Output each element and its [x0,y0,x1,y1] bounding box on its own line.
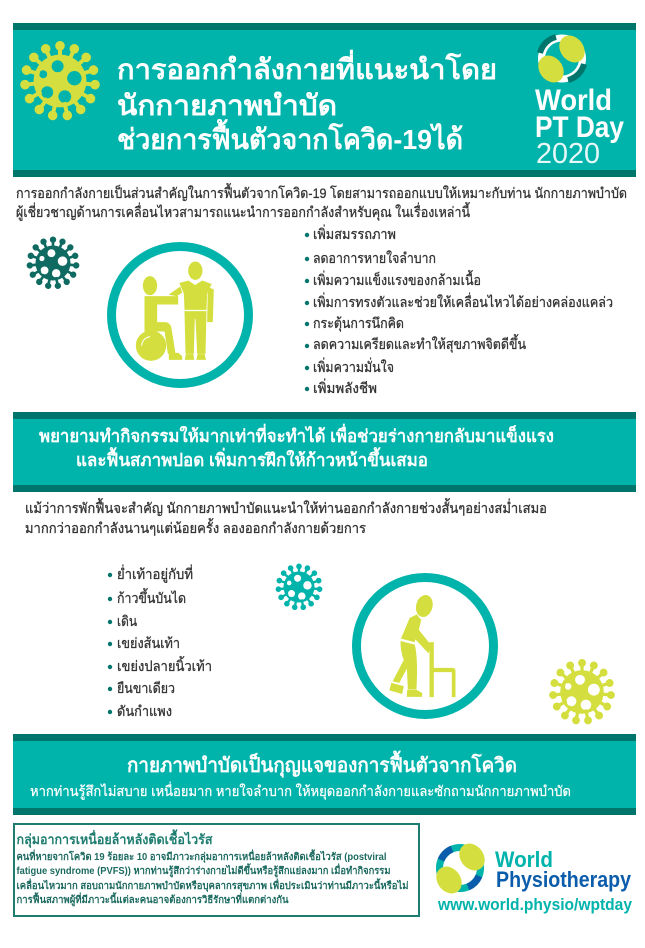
logo: World Physiotherapy: World [495,847,553,872]
icon: dark green virus [26,236,80,290]
icon: lime virus lower right [549,659,615,725]
icon: person with walker circle [356,578,494,714]
list: benefits of exercise: เพิ่มความมั่นใจ [313,358,394,375]
logo: World PT Day 2020: PT Day [535,111,624,144]
logo: World PT Day 2020: 2020 [536,138,600,170]
list: benefits of exercise [305,225,613,396]
text block: rest and short exercise advice: แม้ว่าการพักฟื้นจะสำคัญ นักกายภาพบำบัดแนะนำให้ท่านออกกำลังกายช่วงสั้นๆอย่างสม่ำเสมอ [25,498,547,516]
icon: wheelchair rehabilitation circle [112,246,248,384]
logo: World Physiotherapy: Physiotherapy [496,867,632,892]
icon: teal virus [275,564,323,611]
list: benefits of exercise: เพิ่มความแข็งแรงของกล้ามเนื้อ [313,270,481,288]
title: การออกกำลังกายที่แนะนำโดย [117,49,497,85]
logo: World Physiotherapy [431,838,632,914]
panel: activity banner: และฟื้นสภาพปอด เพิ่มการฝึกให้ก้าวหน้าขึ้นเสมอ [76,447,428,470]
list: suggested exercises: ดันกำแพง [117,703,172,719]
logo: World Physiotherapy: www.world.physio/wptday [437,895,632,914]
list: suggested exercises [108,565,212,719]
text block: rest and short exercise advice: มากกว่าออกกำลังนานๆแต่น้อยครั้ง ลองออกกำลังกายด้วยการ [25,518,366,536]
panel: post viral fatigue syndrome box: การฟื้นสภาพผู้ที่มีภาวะนี้แต่ละคนอาจต้องการวิธีรักษาที่แตกต่างกัน [16,892,289,907]
panel: key to recovery banner: หากท่านรู้สึกไม่สบาย เหนื่อยมาก หายใจลำบาก ให้หยุดออกกำลังกายและซักถามนักกายภาพบำบัด [30,782,571,800]
title: นักกายภาพบำบัด [117,90,337,121]
panel: key to recovery banner [13,734,636,815]
panel: post viral fatigue syndrome box: กลุ่มอาการเหนื่อยล้าหลังติดเชื้อไวรัส [16,829,213,848]
list: suggested exercises: เขย่งส้นเท้า [117,635,180,651]
panel: key to recovery banner: กายภาพบำบัดเป็นกุญแจของการฟื้นตัวจากโควิด [127,750,517,778]
panel: post viral fatigue syndrome box: เคลื่อนไหวมาก สอบถามนักกายภาพบำบัดหรือบุคลากรสุขภาพ เพื่อประเมินว่าท่านมีภาวะนี้หรือไม่ [16,878,408,892]
title [117,49,497,155]
list: suggested exercises: เดิน [117,613,137,629]
panel: post viral fatigue syndrome box: fatigue syndrome (PVFS)) หากท่านรู้สึกว่าร่างกายไม่ดีขึ้นหรือรู้สึกแย่ลงมาก เมื่อทำกิจกรรม [16,863,390,878]
text block: introduction: ผู้เชี่ยวชาญด้านการเคลื่อนไหวสามารถแนะนำการออกกำลังสำหรับคุณ ในเรื่องเหล่านี้ [16,202,470,221]
logo: World PT Day 2020: World [535,84,612,117]
panel: activity banner [13,412,636,492]
list: benefits of exercise: ลดความเครียดและทำให้สุขภาพจิตดีขึ้น [313,334,526,353]
list: suggested exercises: ยืนขาเดียว [117,680,175,696]
logo: World PT Day 2020 [533,30,624,170]
panel: activity banner: พยายามทำกิจกรรมให้มากเท่าที่จะทำได้ เพื่อช่วยร่างกายกลับมาแข็งแรง [39,423,554,446]
text block: introduction [16,183,627,221]
list: benefits of exercise: เพิ่มการทรงตัวและช่วยให้เคลื่อนไหวได้อย่างคล่องแคล่ว [313,293,613,310]
panel: post viral fatigue syndrome box: คนที่หายจากโควิด 19 ร้อยละ 10 อาจมีภาวะกลุ่มอาการเหนื่อยล้าหลังติดเชื้อไวรัส (postviral [16,849,387,863]
list: suggested exercises: ก้าวขึ้นบันได [117,588,186,606]
list: benefits of exercise: เพิ่มสมรรถภาพ [313,225,396,242]
list: suggested exercises: ย่ำเท้าอยู่กับที่ [117,565,193,583]
panel: title banner [13,23,636,177]
list: benefits of exercise: กระตุ้นการนึกคิด [313,315,404,332]
text block: rest and short exercise advice [25,498,547,536]
list: benefits of exercise: เพิ่มพลังชีพ [313,379,377,396]
title: ช่วยการฟื้นตัวจากโควิด-19ได้ [117,118,463,155]
list: suggested exercises: เขย่งปลายนิ้วเท้า [117,656,212,674]
list: benefits of exercise: ลดอาการหายใจลำบาก [313,250,436,266]
icon: lime virus [20,41,100,121]
panel: post viral fatigue syndrome box [14,824,419,916]
